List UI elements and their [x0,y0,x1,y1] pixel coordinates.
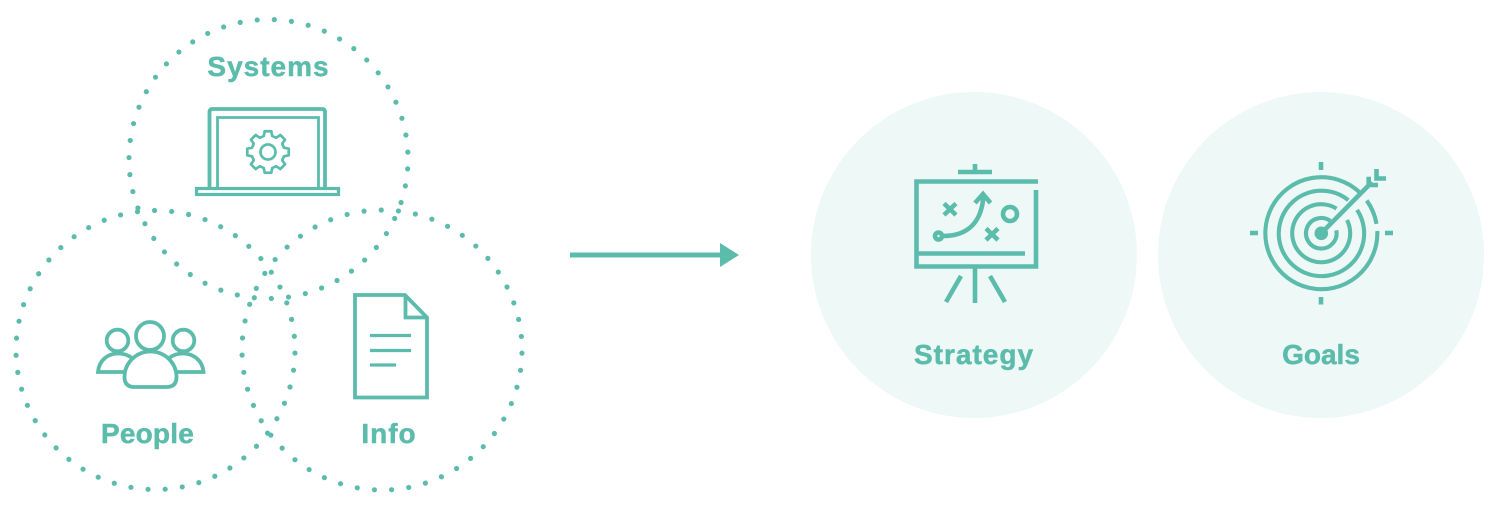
heading: people: People [101,418,194,449]
panel: strategy [811,92,1137,418]
dotted circle: systems [129,20,408,298]
dotted circle: info [242,210,522,490]
icon: document [355,295,427,398]
heading: goals: Goals [1282,339,1360,370]
heading: strategy: Strategy [914,339,1034,370]
icon: strategy board [916,164,1038,303]
goals background circle [1158,92,1484,418]
icon: laptop with gear [196,109,338,194]
strategy background circle [811,92,1137,418]
icon: people group [98,322,204,387]
heading: info: Info [361,418,417,449]
dotted circle: people [16,210,295,490]
heading: systems: Systems [207,51,330,82]
arrow [570,243,739,267]
panel: goals [1158,92,1484,418]
icon: target with arrow [1250,162,1393,304]
venn diagram [16,20,522,490]
